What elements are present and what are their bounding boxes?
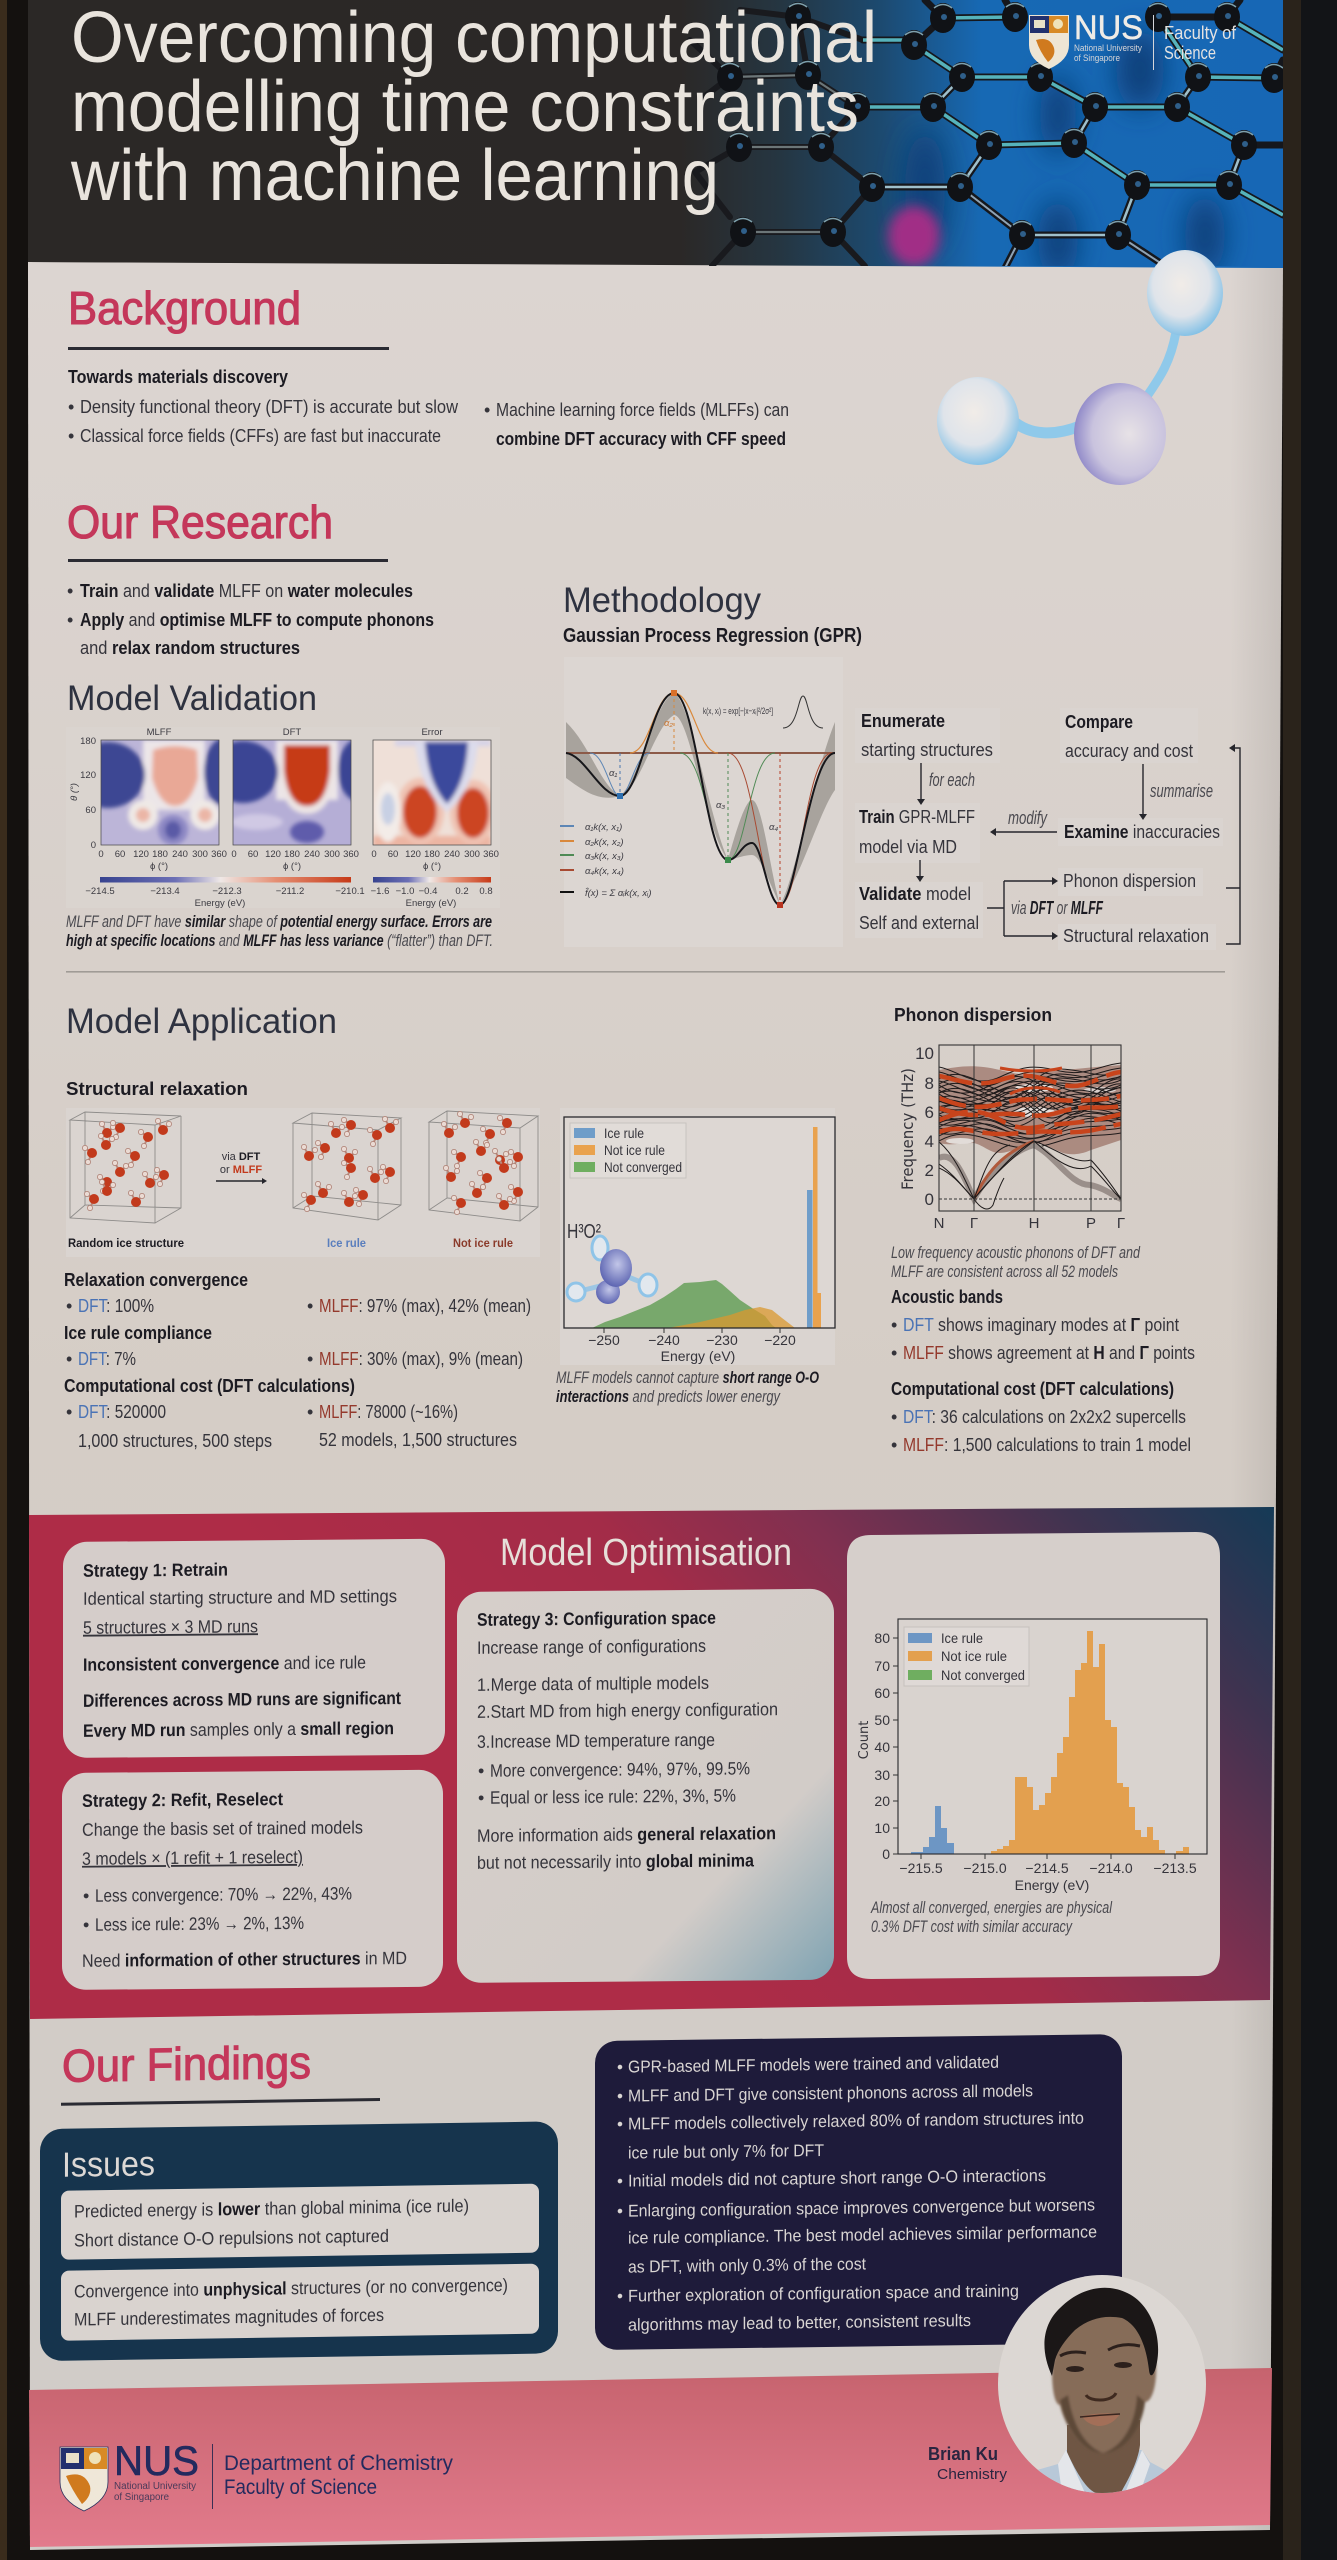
chart: gaussian process regression curve: α₃k(x, x₃) [585,851,624,862]
legend: energy colour bars: −213.4 [150,886,180,897]
caption: energy histogram [556,1368,819,1406]
chart: energy histogram after optimisation: Count [857,1721,872,1759]
text block: relaxation statistics: Relaxation convergence [64,1270,248,1290]
NUS logo and faculty, top right: Science [1164,43,1216,63]
card: strategy 2: Strategy 2: Refit, Reselect [82,1789,283,1811]
text block: background bullets: combine DFT accuracy with CFF speed [496,429,786,449]
text block: research bullets [67,581,434,658]
chart: phonon band structure [898,1044,1125,1232]
card: strategy 2: 3 models × (1 refit + 1 reselect) [82,1847,303,1869]
diagram: methodology workflow: Self and external [859,913,979,933]
caption: optimised results: 0.3% DFT cost with similar accuracy [871,1917,1073,1936]
card: strategy 3: 3.Increase MD temperature range [477,1730,715,1752]
chart: energy histogram: −240 [648,1332,680,1348]
diagram: ice crystal structures: Not ice rule [453,1236,513,1250]
card: issues: MLFF underestimates magnitudes of forces [74,2305,384,2330]
legend: energy colour bars: −214.5 [85,886,115,897]
graphene bonds, dim [690,10,872,266]
diagram: methodology workflow: Phonon dispersion [1063,871,1196,891]
panel: phonon dispersion [891,1005,1195,1455]
chart: phonon band structure: P [1086,1215,1096,1232]
NUS logo and faculty, top right: NUS [1074,9,1143,47]
chart: gaussian process regression curve: α₁ [609,768,617,779]
NUS logo and faculty, top right: National University [1074,43,1142,53]
banner with graphene image [28,0,1287,280]
hair [1044,2288,1158,2376]
chart: phonon band structure: 0 [925,1190,934,1209]
chart: energy histogram: −230 [706,1332,738,1348]
card: strategy 1: Identical starting structure and MD settings [83,1586,397,1609]
text block: author: Chemistry [937,2466,1008,2483]
panel: conclusions: Enlarging configuration space improves convergence but worsens [628,2195,1095,2221]
caption: model validation: MLFF and DFT have similar shape of potential energy surface. Errors are [66,912,492,931]
logo: NUS [60,2437,213,2511]
panel: background [68,282,789,449]
text block: background bullets [68,397,789,449]
card: strategy 2: Less convergence: 70% → 22%, 43% [95,1883,352,1906]
text block: relaxation statistics: MLFF: 97% (max), 42% (mean) [319,1296,531,1316]
chart: energy histogram after optimisation: 20 [874,1793,890,1809]
divider [66,971,1225,973]
chart: MLFF heatmap: ϕ (°) [150,861,168,872]
text block: research bullets: Train and validate MLFF on water molecules [80,581,413,601]
chart: MLFF heatmap: 120 [133,849,149,860]
panel: conclusions: • [617,2058,623,2077]
text block: background bullets: Density functional theory (DFT) is accurate but slow [80,397,459,417]
text block: department: Department of Chemistry [224,2452,453,2475]
diagram: ice crystal structures: or MLFF [220,1164,262,1176]
facial features [1060,2345,1140,2356]
card: strategy 1: Strategy 1: Retrain [83,1560,228,1581]
panel: conclusions: algorithms may lead to better, consistent results [628,2311,971,2335]
chart: energy histogram after optimisation: Not converged [941,1667,1025,1683]
chart: MLFF heatmap: θ (°) [69,783,80,801]
logo: NUS: of Singapore [114,2492,169,2503]
card: strategy 1 [63,1539,445,1758]
card: strategy 3: Strategy 3: Configuration space [477,1608,716,1630]
caption: optimised results: Almost all converged, energies are physical [870,1898,1113,1917]
text block: phonon computational cost: • [891,1407,897,1427]
chart: phonon band structure: 2 [925,1161,934,1180]
chart: energy histogram after optimisation: −215.5 [899,1860,943,1876]
title: with machine learning [70,136,719,216]
card: strategy 3: • [478,1761,484,1781]
chart: energy histogram after optimisation: −213.5 [1153,1860,1197,1876]
panel: conclusions: GPR-based MLFF models were trained and validated [628,2053,999,2077]
text block: relaxation statistics: MLFF: 30% (max), 9% (mean) [319,1349,523,1369]
legend: energy colour bars: −211.2 [276,886,304,897]
heading: model validation: Model Validation [67,679,317,718]
card: issues: Convergence into unphysical structures (or no convergence) [74,2275,508,2302]
legend: energy colour bars: −212.3 [212,886,242,897]
chart: MLFF heatmap: 60 [85,805,96,816]
chart: phonon band structure: 10 [915,1044,934,1063]
text block: author: Brian Ku [928,2444,998,2464]
diagram: ice crystal structures: Random ice structure [68,1236,184,1250]
chart: DFT heatmap: ϕ (°) [283,861,301,872]
chart: gaussian process regression curve: f̂(x) = Σ αᵢk(x, xᵢ) [585,887,652,899]
text block: background bullets: • [68,397,74,417]
card: strategy 1: Every MD run samples only a small region [83,1718,394,1741]
chart: DFT heatmap: 180 [284,849,300,860]
caption: energy histogram: MLFF models cannot capture short range O-O [556,1368,819,1387]
chart: error heatmap: 240 [444,849,460,860]
legend: energy colour bars: 0.8 [479,886,493,897]
neck [1067,2420,1140,2494]
face [1052,2312,1156,2453]
legend: energy colour bars: 0.2 [455,886,469,897]
heading: our findings: Our Findings [62,2036,311,2092]
legend: energy colour bars: −1.6 [371,886,389,897]
card: strategy 2: • [83,1915,89,1935]
chart: energy histogram: Not converged [604,1159,682,1175]
caption: optimised results [870,1898,1113,1936]
title [70,0,877,216]
NUS logo and faculty, top right: Faculty of [1164,23,1237,43]
card: issues: Short distance O-O repulsions not captured [74,2226,389,2251]
subheading: phonon dispersion: Phonon dispersion [894,1005,1052,1025]
diagram: ice crystal structures: Ice rule [327,1236,366,1250]
chart: MLFF heatmap [70,728,227,871]
card: strategy 2 [62,1770,443,1990]
diagram: methodology workflow: Structural relaxation [1063,926,1209,946]
chart: MLFF heatmap: 300 [192,849,208,860]
chart: gaussian process regression curve: k(x, xᵢ) = exp[−|x−xᵢ|²/2σ²] [703,706,773,717]
chart: error heatmap: 60 [388,849,398,860]
text block: relaxation statistics: DFT: 100% [78,1296,154,1316]
chart: DFT heatmap: 0 [231,849,237,860]
panel: conclusions: • [617,2115,623,2134]
NUS logo and faculty, top right: of Singapore [1074,53,1120,63]
panel: model validation [66,679,500,950]
chart: DFT heatmap: 300 [324,849,340,860]
text block: research bullets: Apply and optimise MLFF to compute phonons [80,610,434,630]
diagram: methodology workflow: Compare [1065,712,1133,732]
text block: relaxation statistics: 1,000 structures, 500 steps [78,1431,272,1451]
panel: conclusions: • [617,2202,623,2221]
card: strategy 1: Differences across MD runs are significant [83,1688,401,1711]
chart: energy histogram after optimisation: −214.5 [1025,1860,1069,1876]
subheading: structural relaxation: Structural relaxation [66,1079,248,1099]
chart: error heatmap: 300 [464,849,480,860]
card: issues [40,2121,558,2361]
panel: conclusions: MLFF and DFT give consistent phonons across all models [628,2081,1033,2106]
card: strategy 3: More convergence: 94%, 97%, 99.5% [490,1758,750,1781]
text block: department [224,2452,453,2499]
text block: relaxation statistics: • [66,1349,72,1369]
text block: relaxation statistics: DFT: 520000 [78,1402,166,1422]
heading: our research: Our Research [67,496,333,548]
panel: conclusions: • [617,2172,623,2191]
footer band [29,2368,1272,2547]
chart: phonon band structure: Γ [970,1215,978,1232]
chart: energy histogram: Energy (eV) [661,1348,735,1364]
diagram: methodology workflow: Examine inaccuracies [1064,822,1220,842]
text block: acoustic bands [891,1287,1195,1363]
card: strategy 3: • [478,1788,484,1808]
chart: energy histogram after optimisation: 60 [874,1685,890,1701]
text block: phonon computational cost: MLFF: 1,500 calculations to train 1 model [903,1435,1191,1455]
chart: error heatmap [371,727,499,872]
chart: MLFF heatmap: 240 [172,849,188,860]
chart: gaussian process regression curve: α₄k(x, x₄) [585,866,624,877]
chart: energy histogram: Not ice rule [604,1142,665,1158]
text block: research bullets: and relax random structures [80,638,300,658]
chart: phonon band structure: Frequency (THz) [898,1068,917,1190]
diagram: ice crystal structures: via DFT [222,1151,261,1163]
chart: energy histogram after optimisation: 10 [874,1820,890,1836]
chart: MLFF heatmap: 360 [211,849,227,860]
panel: our findings and issues [40,2032,558,2361]
heading: background: Background [68,282,301,334]
chart: phonon band structure: N [934,1215,944,1232]
chart: energy histogram after optimisation: 40 [874,1739,890,1755]
chart: MLFF heatmap: 180 [80,736,96,747]
text block: relaxation statistics: DFT: 7% [78,1349,136,1369]
legend: energy colour bars: Energy (eV) [195,898,245,909]
panel: model application [64,1002,835,1451]
caption: model validation [66,912,493,950]
NUS logo and faculty, top right [1029,9,1237,70]
diagram: methodology workflow: accuracy and cost [1065,741,1193,761]
panel: conclusions: ice rule compliance. The best model achieves similar performance [628,2222,1097,2248]
chart: energy histogram: −250 [588,1332,620,1348]
text block: author [928,2444,1008,2483]
text block: relaxation statistics [64,1270,531,1451]
text block: relaxation statistics: • [66,1296,72,1316]
text block: acoustic bands: DFT shows imaginary modes at Γ point [903,1315,1179,1335]
caption: energy histogram: interactions and predicts lower energy [556,1387,781,1406]
text block: background bullets: Machine learning force fields (MLFFs) can [496,400,789,420]
legend: energy colour bars [85,877,493,909]
diagram: methodology workflow: via DFT or MLFF [1011,898,1104,918]
text block: phonon computational cost: • [891,1435,897,1455]
portrait photo [998,2275,1206,2494]
chart: phonon band structure: H [1029,1215,1039,1232]
legend: energy colour bars: Energy (eV) [406,898,456,909]
chart: gaussian process regression curve [560,657,843,947]
shirt [1030,2450,1170,2493]
text block: towards materials discovery: Towards materials discovery [68,367,288,387]
chart: gaussian process regression curve: α₄ [769,822,778,833]
diagram: methodology workflow: starting structures [861,740,993,760]
caption: phonon dispersion [891,1243,1140,1281]
chart: DFT heatmap [232,728,359,871]
text block: relaxation statistics: Ice rule compliance [64,1323,212,1343]
panel: methodology [560,581,1240,950]
panel: our research [67,496,434,658]
icon: H3O2 molecule [567,1221,657,1304]
caption: phonon dispersion: Low frequency acoustic phonons of DFT and [891,1243,1140,1262]
heading: model optimisation: Model Optimisation [500,1532,792,1574]
text block: relaxation statistics: 52 models, 1,500 structures [319,1430,517,1450]
diagram: methodology workflow: model via MD [859,837,957,857]
chart: MLFF heatmap: MLFF [147,727,172,738]
text block: phonon computational cost: DFT: 36 calculations on 2x2x2 supercells [903,1407,1186,1427]
card: strategy 3: Increase range of configurations [477,1636,706,1658]
text block: relaxation statistics: • [307,1349,313,1369]
card: strategy 2: • [83,1886,89,1906]
chart: energy histogram after optimisation: Ice rule [941,1630,983,1646]
text block: acoustic bands: • [891,1343,897,1363]
card: strategy 1: 5 structures × 3 MD runs [83,1616,258,1638]
caption: model validation: high at specific locations and MLFF has less variance (“flatter”) than DFT. [66,931,493,950]
chart: phonon band structure: Γ [1117,1215,1125,1232]
chart: MLFF heatmap: 120 [80,770,96,781]
diagram: methodology workflow: Train GPR-MLFF [859,807,975,827]
chart: error heatmap: 0 [371,849,377,860]
chart: gaussian process regression curve: α₂ [664,718,673,729]
subheading: gaussian process regression: Gaussian Process Regression (GPR) [563,625,862,647]
panel: conclusions: • [617,2087,623,2106]
panel: conclusions: ice rule but only 7% for DFT [628,2141,824,2163]
chart: energy histogram after optimisation: Not ice rule [941,1648,1007,1664]
chart: gaussian process regression curve: α₁k(x, x₁) [585,822,622,833]
card: strategy 1: Inconsistent convergence and ice rule [83,1652,366,1675]
card: strategy 3: More information aids general relaxation [477,1823,776,1846]
card: strategy 3: but not necessarily into global minima [477,1850,755,1873]
card: strategy 2: Need information of other structures in MD [82,1948,407,1971]
chart: DFT heatmap: 240 [304,849,320,860]
chart: energy histogram after optimisation: 70 [874,1658,890,1674]
chart: energy histogram after optimisation [857,1619,1207,1893]
chart: energy histogram after optimisation: Energy (eV) [1015,1877,1089,1893]
panel: conclusions [595,2034,1122,2350]
card: strategy 3 [457,1589,834,1983]
card: strategy 2: Change the basis set of trained models [82,1817,363,1840]
card: strategy 3: Equal or less ice rule: 22%, 3%, 5% [490,1786,736,1808]
text block: department: Faculty of Science [224,2476,377,2499]
chart: energy histogram [560,1108,835,1365]
heading: methodology: Methodology [563,581,761,620]
text block: research bullets: • [67,581,73,601]
logo: NUS: National University [114,2481,196,2492]
text block: background bullets: Classical force fields (CFFs) are fast but inaccurate [80,426,441,446]
legend: energy colour bars: −210.1 [335,886,365,897]
chart: energy histogram: −220 [764,1332,796,1348]
text block: acoustic bands: MLFF shows agreement at H and Γ points [903,1343,1195,1363]
panel: conclusions: Further exploration of configuration space and training [628,2281,1019,2306]
chart: error heatmap: Error [421,727,443,738]
legend: energy colour bars: −1.0 [396,886,414,897]
chart: MLFF heatmap: 60 [115,849,125,860]
chart: phonon band structure: 6 [925,1103,934,1122]
diagram: methodology workflow: for each [929,770,975,790]
panel: conclusions: • [617,2287,623,2306]
heading: model application: Model Application [66,1002,337,1041]
chart: gaussian process regression curve: α₃ [716,800,725,811]
panel: conclusions: MLFF models collectively relaxed 80% of random structures into [628,2109,1084,2134]
chart: energy histogram after optimisation: 30 [874,1767,890,1783]
text block: phonon computational cost: Computational cost (DFT calculations) [891,1379,1174,1399]
chart: energy histogram after optimisation: −215.0 [963,1860,1007,1876]
chart: DFT heatmap: 60 [248,849,258,860]
chart: energy histogram: Ice rule [604,1125,644,1141]
diagram: methodology workflow: summarise [1150,781,1213,801]
title: modelling time constraints [71,67,859,147]
text block: background bullets: • [484,400,490,420]
card: strategy 3: 1.Merge data of multiple models [477,1673,709,1695]
icon: H3O2 molecule: H³O² [567,1221,601,1243]
legend: energy colour bars: −0.4 [419,886,437,897]
text block: acoustic bands: • [891,1315,897,1335]
text block: phonon computational cost [891,1379,1191,1455]
card: issues: Predicted energy is lower than global minima (ice rule) [74,2196,469,2222]
diagram: methodology workflow [855,708,1240,950]
caption: phonon dispersion: MLFF are consistent across all 52 models [891,1262,1118,1281]
diagram: methodology workflow: Enumerate [861,711,945,731]
chart: gaussian process regression curve: α₂k(x, x₂) [585,837,624,848]
card: optimised results chart [847,1532,1220,1979]
diagram: methodology workflow: Validate model [859,884,971,904]
chart: MLFF heatmap: 0 [98,849,104,860]
text block: research bullets: • [67,610,73,630]
chart: DFT heatmap: 120 [265,849,281,860]
diagram: ice crystal structures [66,1108,540,1257]
chart: DFT heatmap: DFT [283,727,301,738]
chart: energy histogram after optimisation: 50 [874,1712,890,1728]
panel: conclusions: Initial models did not capture short range O-O interactions [628,2166,1046,2191]
chart: error heatmap: ϕ (°) [423,861,441,872]
chart: error heatmap: 180 [424,849,440,860]
chart: MLFF heatmap: 0 [91,840,96,851]
panel: model optimisation [29,1507,1274,2019]
title: Overcoming computational [71,0,877,78]
card: strategy 3: 2.Start MD from high energy configuration [477,1699,778,1722]
chart: energy histogram after optimisation: −214.0 [1089,1860,1133,1876]
chart: MLFF heatmap: 180 [152,849,168,860]
text block: acoustic bands: Acoustic bands [891,1287,1003,1307]
text block: relaxation statistics: MLFF: 78000 (~16%) [319,1402,458,1422]
logo: NUS: NUS [114,2437,199,2484]
chart: error heatmap: 120 [405,849,421,860]
panel: conclusions: as DFT, with only 0.3% of the cost [628,2254,866,2277]
card: issues: Issues [62,2144,155,2185]
chart: error heatmap: 360 [483,849,499,860]
card: strategy 2: Less ice rule: 23% → 2%, 13% [95,1913,304,1935]
diagram: methodology workflow: modify [1008,808,1048,828]
icon: molecule illustration [937,250,1223,485]
chart: energy histogram after optimisation: 80 [874,1630,890,1646]
text block: relaxation statistics: • [307,1296,313,1316]
chart: phonon band structure: 8 [925,1074,934,1093]
text block: relaxation statistics: • [307,1402,313,1422]
text block: background bullets: • [68,426,74,446]
chart: phonon band structure: 4 [925,1132,934,1151]
text block: relaxation statistics: • [66,1402,72,1422]
text block: relaxation statistics: Computational cost (DFT calculations) [64,1376,355,1396]
chart: DFT heatmap: 360 [343,849,359,860]
chart: energy histogram after optimisation: 0 [882,1846,890,1862]
